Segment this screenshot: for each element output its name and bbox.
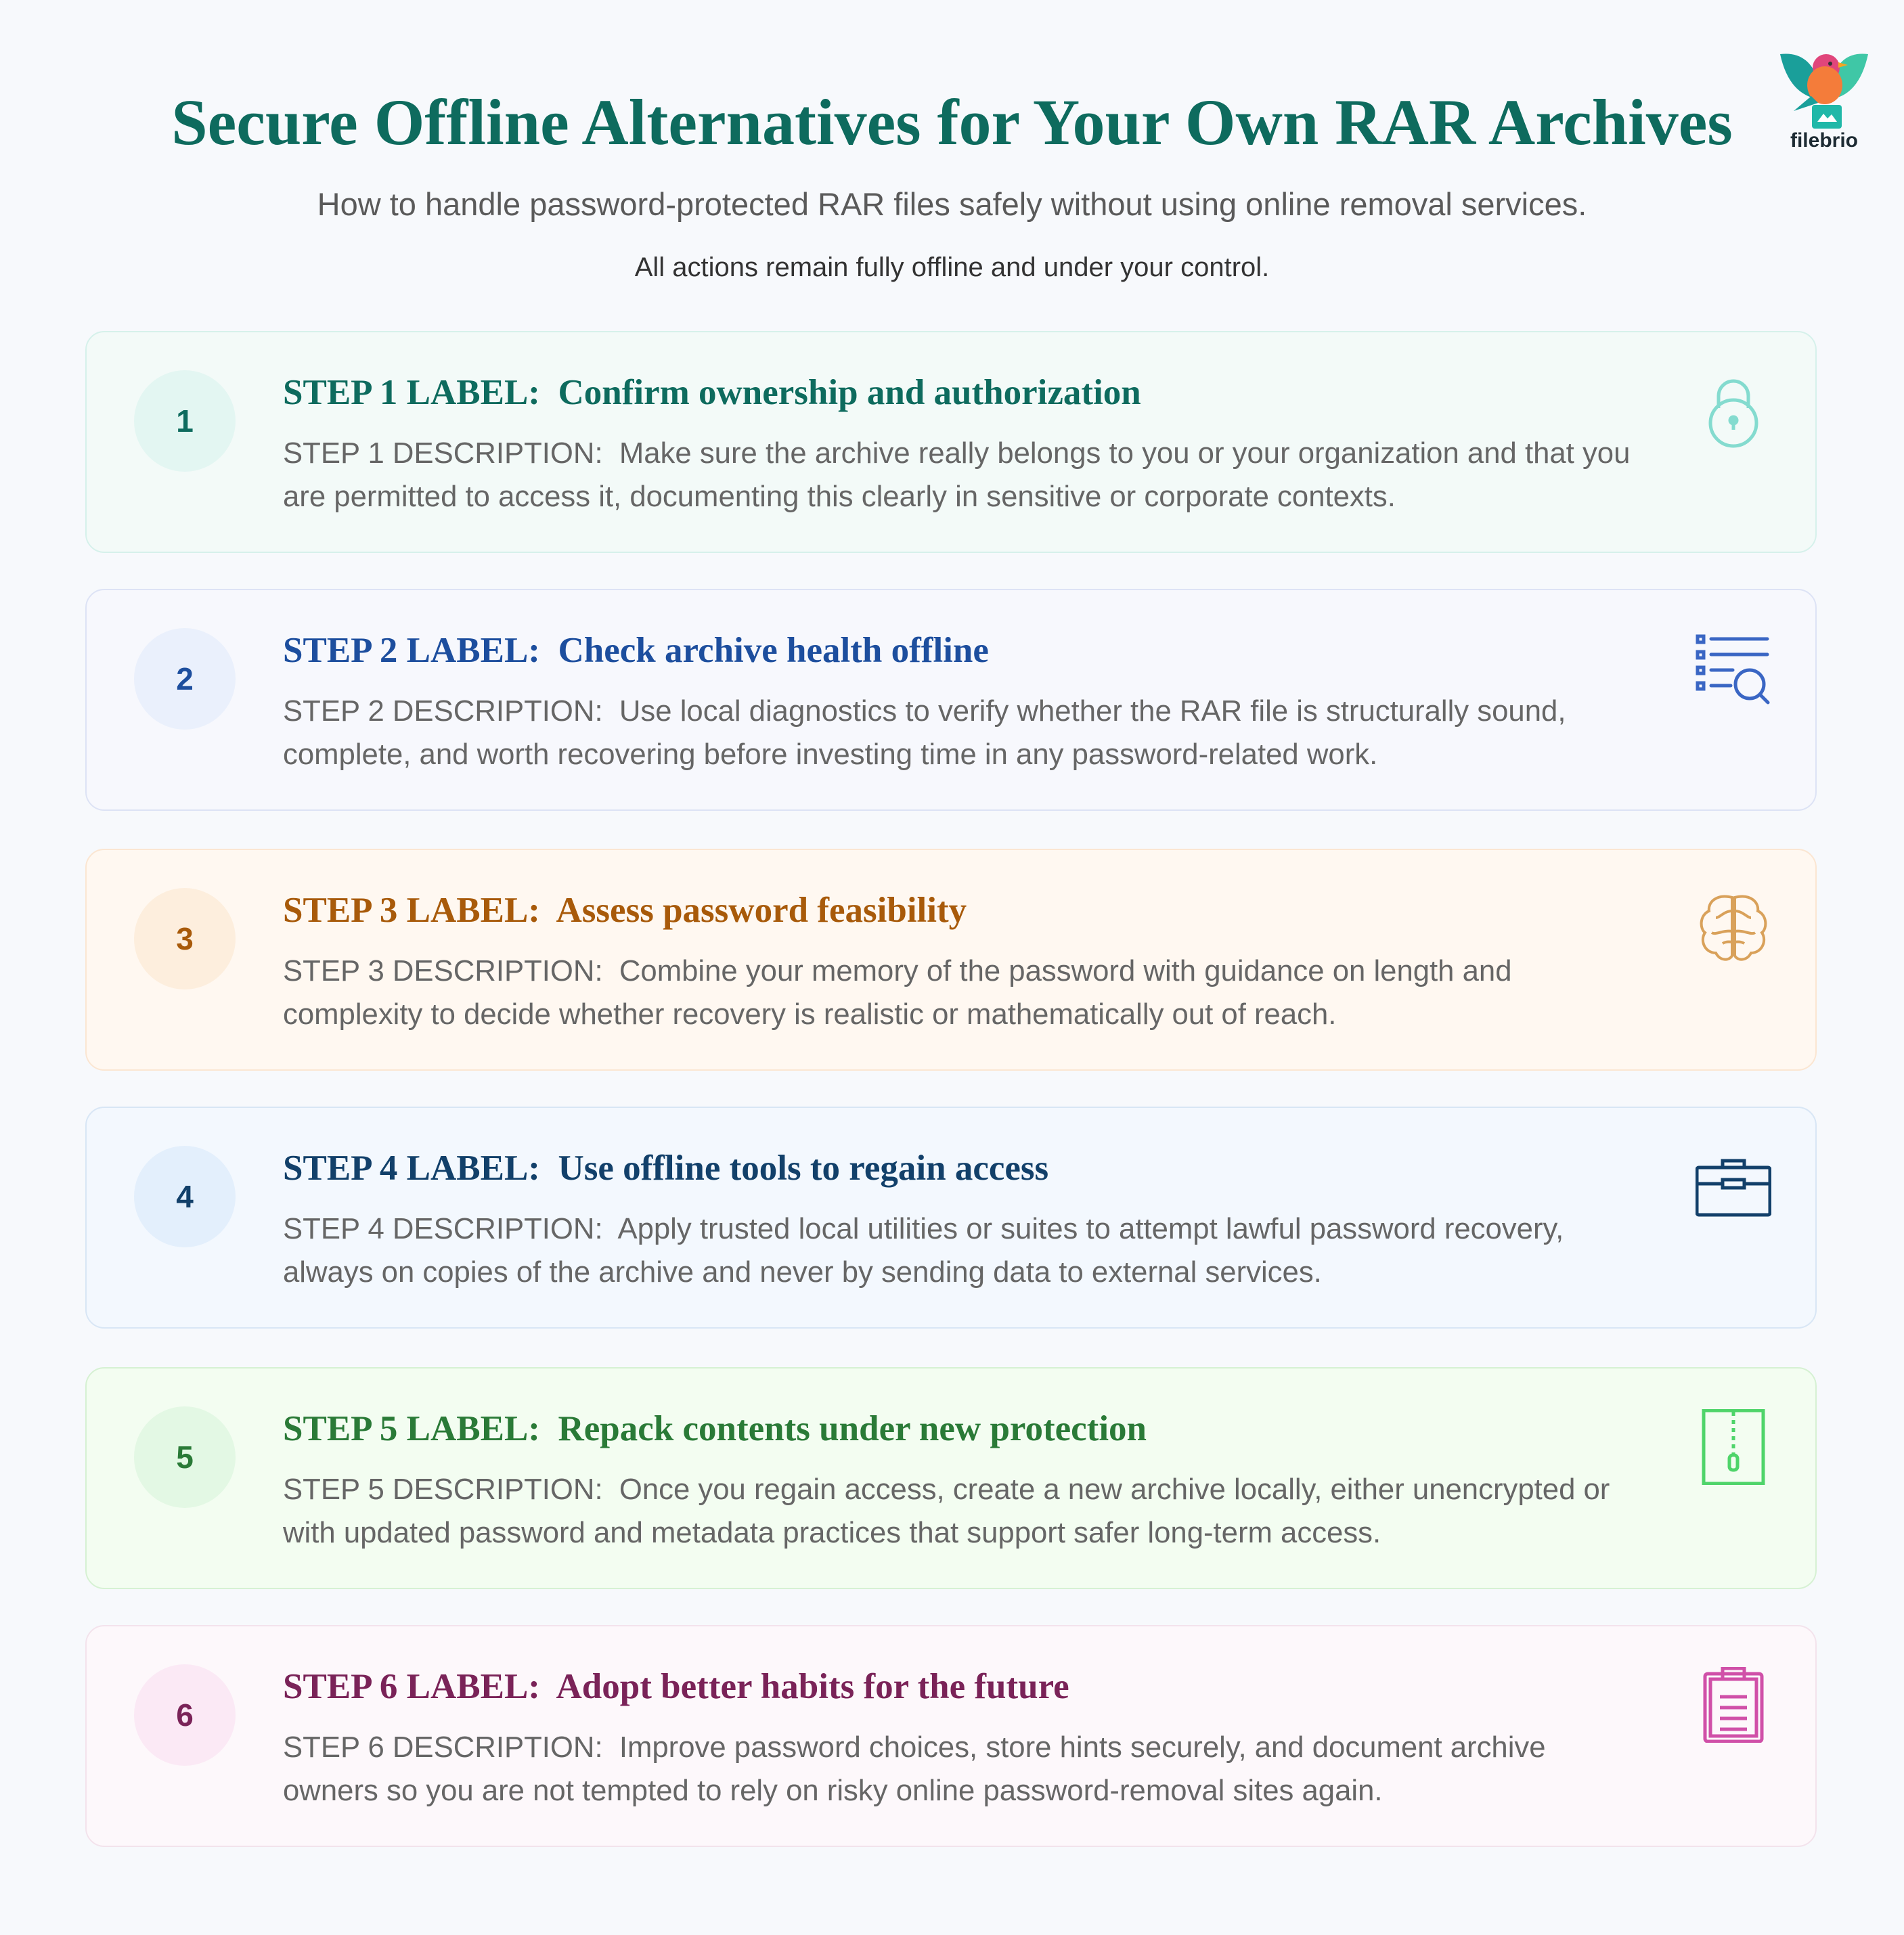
step 4 description: STEP 4 DESCRIPTION: Apply trusted local utilities or suites to attempt lawful password recovery, always on copies of the archive and never by sending data to external services. [283, 1212, 1564, 1289]
step number 6: 6 [176, 1697, 194, 1733]
step number 4 [134, 1146, 236, 1247]
step number 4: 4 [176, 1179, 194, 1214]
subtitle: How to handle password-protected RAR files safely without using online removal services. [317, 186, 1587, 222]
panel: step 6 [85, 1625, 1817, 1847]
icon: list search [1696, 635, 1769, 704]
panel: step 1 [85, 331, 1817, 553]
icon: brain [1700, 895, 1767, 961]
step number 1 [134, 370, 236, 472]
step 3 description: STEP 3 DESCRIPTION: Combine your memory of the password with guidance on length and complexity to decide whether recovery is realistic or mathematically out of reach. [283, 954, 1512, 1031]
icon: zip file [1702, 1409, 1765, 1485]
title: Secure Offline Alternatives for Your Own RAR Archives [171, 86, 1733, 158]
panel: step 4 [85, 1107, 1817, 1329]
step 5 description: STEP 5 DESCRIPTION: Once you regain access, create a new archive locally, either unencrypted or with updated password and metadata practices that support safer long-term access. [283, 1473, 1610, 1549]
step number 1: 1 [176, 403, 194, 439]
step number 5: 5 [176, 1440, 194, 1475]
step 1 description: STEP 1 DESCRIPTION: Make sure the archive really belongs to you or your organization and that you are permitted to access it, documenting this clearly in sensitive or corporate contexts. [283, 437, 1630, 513]
step 6 label: STEP 6 LABEL: Adopt better habits for the future [283, 1667, 1069, 1706]
step 2 description: STEP 2 DESCRIPTION: Use local diagnostics to verify whether the RAR file is structurally sound, complete, and worth recovering before investing time in any password-related work. [283, 694, 1566, 771]
icon: padlock [1708, 379, 1758, 448]
logo: filebrio: filebrio [1790, 129, 1858, 152]
step 4 label: STEP 4 LABEL: Use offline tools to regain access [283, 1149, 1048, 1188]
step 3 label: STEP 3 LABEL: Assess password feasibility [283, 891, 967, 930]
step number 3: 3 [176, 921, 194, 956]
step number 5 [134, 1406, 236, 1508]
step 2 label: STEP 2 LABEL: Check archive health offline [283, 631, 989, 670]
step 5 label: STEP 5 LABEL: Repack contents under new protection [283, 1409, 1147, 1448]
panel: step 5 [85, 1367, 1817, 1589]
step number 6 [134, 1664, 236, 1766]
step 6 description: STEP 6 DESCRIPTION: Improve password choices, store hints securely, and document archive owners so you are not tempted to rely on risky online password-removal sites again. [283, 1731, 1546, 1807]
step 1 label: STEP 1 LABEL: Confirm ownership and authorization [283, 373, 1141, 412]
panel: step 3 [85, 849, 1817, 1071]
step number 2 [134, 628, 236, 730]
step number 3 [134, 888, 236, 989]
logo: filebrio [1780, 54, 1868, 152]
panel: step 2 [85, 589, 1817, 811]
step number 2: 2 [176, 661, 194, 696]
icon: toolbox [1696, 1159, 1771, 1217]
note: All actions remain fully offline and under your control. [635, 252, 1269, 282]
icon: clipboard [1703, 1667, 1764, 1743]
